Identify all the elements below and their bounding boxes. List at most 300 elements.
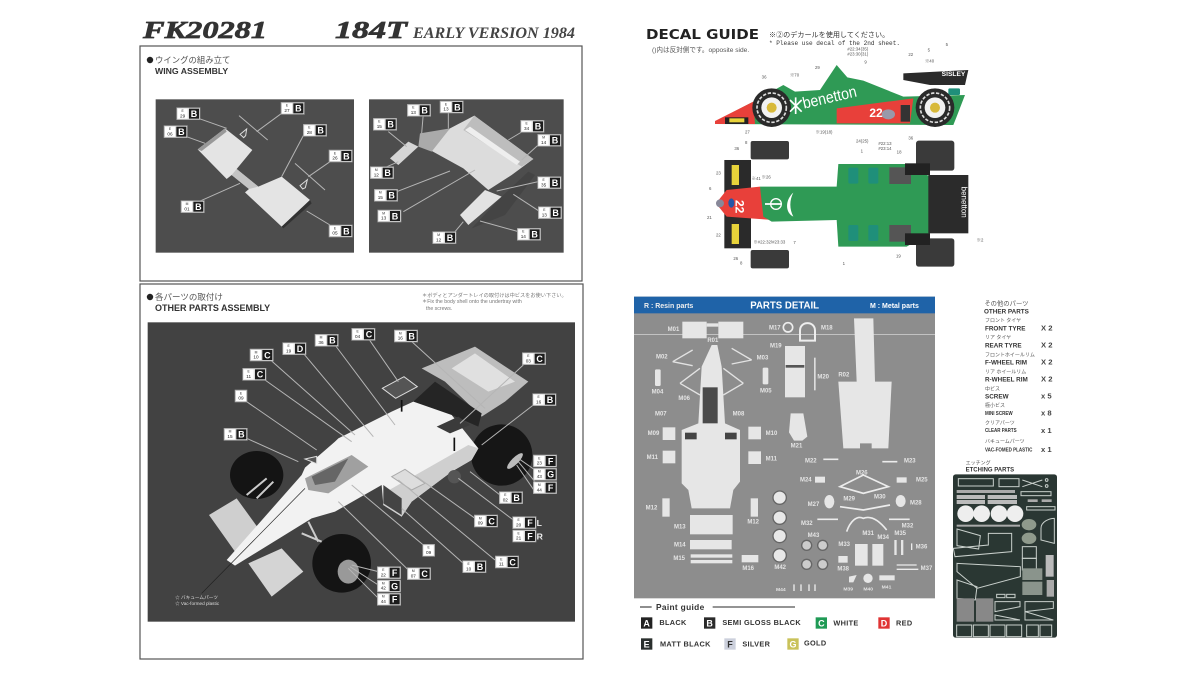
decal diagram: top view: 22 [716, 233, 721, 238]
item: f-wheel rim: X 2 [1041, 357, 1052, 366]
part labels: M15 [673, 556, 686, 562]
tag: E04 C: 04 [355, 334, 361, 339]
tag: E09: 09 [238, 396, 244, 401]
tag: E11 C: 11 [246, 374, 251, 379]
decal diagram: side view: ※19(18) [816, 129, 833, 134]
item: r-wheel rim: リア ホイールリム [985, 370, 1026, 376]
tag: M15 B: M [229, 430, 232, 434]
part labels: M05 [760, 389, 772, 395]
tag: M13 B: B [392, 211, 399, 221]
tag: E29 B: E [182, 109, 185, 113]
tag: E06 B [164, 126, 187, 138]
title: model and version [335, 18, 575, 44]
tag: E11 C lower: E [500, 557, 503, 561]
tag: E02 B [499, 492, 523, 504]
tag: M13 B: M [382, 211, 385, 215]
part labels: M44 [776, 587, 786, 593]
decal diagram: top view: benetton [960, 187, 969, 218]
item: mini screw [985, 402, 1052, 418]
tag: M10 C: C [264, 350, 271, 360]
swatch G gold [787, 638, 827, 650]
wheels M42 and M43 [773, 491, 828, 569]
tag: M10 C [250, 349, 273, 361]
swatch E matt black [641, 638, 711, 650]
swatch D red: RED [896, 618, 912, 627]
tag: E35 B: 35 [541, 182, 547, 187]
tag: E29 B: 29 [180, 113, 186, 118]
tag: E23 F: F [548, 456, 554, 466]
title: product code: FK20281 [142, 18, 267, 44]
tag: E02 B: E [504, 493, 507, 497]
tag: E06 B: E [169, 127, 172, 131]
item: r-wheel rim [985, 370, 1052, 384]
tag: E27 B: 27 [284, 108, 290, 113]
tag: M12 B [370, 167, 394, 179]
part labels: M21 [791, 443, 803, 449]
part labels: M08 [733, 411, 745, 417]
tag: E10 B: 10 [466, 566, 472, 571]
tag: E21 F R: 21 [516, 536, 522, 541]
tag: M16 B [394, 330, 418, 342]
tag: E13 B: E [412, 106, 415, 110]
tag: E06 B: 06 [167, 131, 173, 136]
tag: M07 C [407, 568, 431, 580]
part labels: M12 [646, 505, 658, 511]
decal diagram: side view: ※70 [790, 73, 800, 78]
decal diagram: side view: 36 [908, 135, 914, 140]
note: vac-formed plastic [175, 594, 220, 607]
part labels: R02 [838, 373, 850, 379]
part labels: M11 [766, 457, 778, 463]
tag: E09 [235, 390, 247, 402]
tag: M14 B: 14 [541, 140, 547, 145]
paint guide legend [640, 602, 912, 650]
swatch G gold: G [789, 639, 796, 649]
tag: E03 C: E [527, 354, 530, 358]
tag: M42 G [377, 580, 401, 592]
tag: M12 B lower: 12 [436, 237, 442, 242]
tag: M43 G: G [547, 470, 554, 480]
title: model and version: 184T [335, 18, 409, 44]
decal diagram: top view: 19 [896, 253, 901, 258]
tag: M42 G: G [391, 581, 398, 591]
title: model and version: EARLY VERSION 1984 [412, 25, 575, 42]
tag: M12 B lower: M [437, 233, 440, 237]
tag: M15 B: B [238, 430, 245, 440]
heading: decal guide: DECAL GUIDE [646, 28, 759, 43]
part labels: M32 [801, 521, 813, 527]
tag: E14 B [517, 228, 541, 240]
tag: E04 C [352, 328, 375, 340]
part labels: M07 [655, 411, 667, 417]
tag: E05 B: E [334, 226, 337, 230]
tag: M01 B: 01 [184, 206, 190, 211]
item: vac-formed plastic [985, 439, 1052, 454]
tag: E22 F: F [392, 568, 398, 578]
part labels: M11 [647, 455, 659, 461]
tag: E14 B: 14 [521, 234, 526, 239]
decal diagram: top view: ※41 [752, 176, 761, 181]
tag: M44 F front: F [392, 595, 398, 605]
tag: E35 B: B [552, 178, 559, 188]
tag: M09 C: 09 [478, 521, 483, 526]
tag: M42 G: 42 [381, 586, 386, 591]
swatch C white: C [818, 618, 825, 628]
tag: E21 F R [513, 530, 544, 542]
tag: M44 F front: M [382, 595, 385, 599]
item: clear parts: CLEAR PARTS [985, 428, 1017, 434]
photo: front wing assembly [156, 99, 354, 253]
decal diagram: side view: 5 [946, 42, 949, 47]
car model [202, 338, 535, 598]
item: rear tyre [985, 334, 1052, 349]
tag: M12 B: M [375, 168, 378, 172]
tag: E20 F L: E [518, 518, 521, 522]
part labels: M12 [747, 519, 760, 525]
tag: E34 B: B [535, 122, 542, 132]
item: mini screw: MINI SCREW [985, 411, 1013, 417]
tag: M43 G: 43 [537, 474, 542, 479]
decal diagram: top view: 7 [793, 240, 796, 245]
decal diagram: side view [715, 42, 968, 151]
decal diagram: top view: 1 [861, 149, 864, 154]
part labels: M24 [800, 477, 812, 483]
tag: M14 B: B [552, 136, 559, 146]
decal diagram: top view: 1 [843, 261, 846, 266]
heading: wing assembly: ウイングの組み立て [155, 55, 230, 65]
part labels: M14 [674, 543, 686, 549]
part labels: M01 [668, 327, 680, 333]
tag: E13 B lower: 13 [542, 212, 547, 217]
swatch A black: BLACK [659, 618, 687, 627]
heading: decal guide: ※②のデカールを使用してください。 [769, 30, 889, 39]
part labels [646, 325, 933, 593]
swatch F silver: SILVER [742, 639, 771, 648]
tag: E19 D [283, 343, 306, 355]
panel: other parts assembly [140, 284, 583, 659]
decal diagram: side view: 22 [869, 106, 883, 120]
photo: rear wing assembly [369, 99, 564, 253]
part labels: M22 [805, 459, 817, 465]
tag: M15 B: M [379, 191, 382, 195]
tag: E03 C: 03 [526, 358, 531, 363]
decal diagram: side view: 27 [745, 129, 750, 134]
tag: M12 B: 12 [374, 172, 379, 177]
tag: M36 B: B [329, 336, 336, 346]
item: mini screw: 極小ビス [985, 402, 1005, 409]
tag: E09 lower: E [428, 546, 431, 550]
tag: M44 F front [377, 593, 401, 605]
part labels: M38 [837, 567, 850, 573]
decal diagram: top view: 8 [745, 140, 748, 145]
part labels: M09 [648, 431, 660, 437]
decal diagram: top view: 26 [733, 256, 739, 261]
tag: E23 F: E [538, 456, 541, 460]
item: r-wheel rim: X 2 [1041, 375, 1052, 384]
part labels: M29 [843, 497, 856, 503]
tag: E09 lower [423, 544, 435, 556]
tag: E15 B: B [387, 120, 394, 130]
tag: E20 F L [513, 517, 543, 529]
decal diagram: top view: ※26 [762, 174, 771, 179]
heading: decal guide [646, 28, 900, 54]
swatch C white: WHITE [833, 618, 859, 627]
tag: E02 B: 02 [503, 497, 508, 502]
decal diagram: top view [707, 140, 984, 268]
tag: E29 B [177, 108, 200, 120]
tag: E02 B: B [513, 493, 520, 503]
tag: E13 B upper: E [445, 102, 448, 106]
tag: E20 F L: F [527, 518, 533, 528]
tag: E13 B lower [538, 207, 562, 219]
item: front tyre: X 2 [1041, 324, 1052, 333]
tag: M16 B: B [408, 331, 415, 341]
tag: E16 B: E [538, 395, 541, 399]
tag: E04 C: E [357, 330, 360, 334]
other parts heading: その他のパーツ [984, 299, 1029, 308]
heading: other parts assembly: 各パーツの取付け [155, 292, 223, 302]
tag: E09 lower: 09 [426, 550, 432, 555]
tag: M12 B: B [384, 168, 391, 178]
tag: E26 B: B [343, 151, 350, 161]
tag: E34 B: E [526, 122, 529, 126]
tag: E06 B: B [178, 127, 185, 137]
decal diagram: side view: 29 [815, 65, 820, 70]
decal diagram: side view: #22:13 [878, 141, 892, 146]
tag: M15 B: B [388, 191, 395, 201]
resin body R01 and floor R02 [682, 318, 892, 508]
tag: M15 B: 15 [378, 195, 383, 200]
decal diagram: side view: SISLEY [942, 71, 966, 78]
tag: E03 C: C [536, 354, 543, 364]
part labels: M26 [856, 470, 868, 476]
tag: E10 B: E [468, 562, 471, 566]
part labels: M35 [894, 531, 907, 537]
item: vac-formed plastic: VAC-FOMED PLASTIC [985, 447, 1032, 453]
tag: M15 B: 15 [227, 434, 233, 439]
tag: M13 B: 13 [381, 216, 387, 221]
tag: E21 F R: R [537, 531, 544, 541]
tag: E26 B [329, 150, 352, 162]
decal diagram: top view: 23 [716, 170, 721, 175]
resin and metal parts [655, 322, 918, 591]
heading: decal guide: ()内は反対側です。opposite side. [652, 45, 749, 54]
rear wing model [383, 112, 540, 232]
tag: E03 C [522, 353, 546, 365]
panel: parts detail [634, 297, 935, 598]
tag: E11 C lower: C [509, 557, 516, 567]
header bar: M : Metal parts [870, 303, 919, 310]
tag: M12 B lower: B [447, 233, 454, 243]
tag: M13 B [378, 210, 401, 222]
tag: E11 C lower [495, 556, 519, 568]
tag: E27 B: B [295, 104, 302, 114]
tag: E05 B [329, 225, 352, 237]
decal diagram: side view: benetton [801, 84, 858, 113]
tag: M15 B [224, 428, 247, 440]
part labels: M36 [916, 545, 928, 551]
tag: M09 C [474, 515, 498, 527]
item: r-wheel rim: R-WHEEL RIM [985, 377, 1028, 384]
tag: E29 B: B [191, 109, 198, 119]
tag: E23 F [533, 455, 557, 467]
note: vac-formed plastic: ☆ バキュームパーツ [175, 594, 218, 601]
decal diagram: side view: 36 [762, 74, 767, 79]
item: screw [985, 386, 1052, 400]
item: screw: x 5 [1041, 391, 1052, 400]
part labels: M03 [757, 355, 769, 361]
decal diagram: top view: 21 [707, 215, 712, 220]
tag: M44 F: 44 [537, 487, 542, 492]
decal diagram: side view: #23:14 [878, 146, 892, 151]
decal diagram: side view: 22 [908, 52, 914, 57]
swatch E matt black: MATT BLACK [660, 639, 711, 648]
tag: M07 C: C [421, 569, 428, 579]
decal diagram: top view: ※2 [977, 238, 984, 243]
decal diagram: top view: 22 [732, 200, 746, 214]
tag: E23 F: 23 [537, 461, 542, 466]
tag: E13 B [407, 104, 431, 116]
tag: E28 B: 28 [307, 130, 312, 135]
tag: E15 B: 15 [377, 124, 382, 129]
part labels: M42 [774, 565, 787, 571]
tag: E10 B [463, 561, 486, 573]
heading: other parts assembly [147, 292, 270, 313]
swatch A black [641, 617, 687, 629]
front wing model [187, 113, 330, 228]
tag: E15 B [373, 118, 397, 130]
tag: E05 B: 05 [332, 231, 338, 236]
tag: M14 B: M [542, 136, 545, 140]
tag: E21 F R: E [518, 531, 521, 535]
item: screw: SCREW [985, 393, 1009, 400]
decal diagram: side view: 9 [864, 59, 867, 64]
tag: M07 C: 07 [411, 573, 416, 578]
tag: E09: E [240, 391, 243, 395]
item: front tyre: フロント タイヤ [985, 317, 1021, 324]
tag: M42 G: M [382, 581, 385, 585]
tag: M43 G: M [538, 470, 541, 474]
part labels: M37 [921, 566, 933, 572]
swatch G gold: GOLD [804, 639, 827, 648]
tag: E16 B: B [547, 395, 554, 405]
tag: M10 C: M [255, 350, 258, 354]
tag: E20 F L: L [537, 518, 543, 528]
other parts heading: OTHER PARTS [984, 309, 1029, 316]
swatch B semi gloss black: B [706, 618, 713, 628]
decal diagram: top view: ※#22:32/#23:33 [753, 239, 786, 244]
part labels: R01 [707, 338, 719, 344]
tag: E13 B upper: 13 [443, 107, 449, 112]
tag: M07 C: M [412, 569, 415, 573]
decal diagram: top view: 6 [709, 186, 712, 191]
item: rear tyre: REAR TYRE [985, 342, 1022, 349]
tag: E13 B upper: B [454, 102, 461, 112]
heading: wing assembly: WING ASSEMBLY [155, 66, 228, 76]
part labels: M31 [862, 531, 875, 537]
photo: car assembly [148, 322, 575, 622]
decal diagram: top view: 18 [897, 149, 902, 154]
part labels: M34 [877, 535, 890, 541]
part labels: M32 [902, 523, 914, 529]
heading: other parts assembly: OTHER PARTS ASSEMBLY [155, 303, 270, 313]
tag: E13 B: B [421, 106, 428, 116]
tag: M09 C: C [488, 516, 495, 526]
tag: E11 C: C [257, 370, 264, 380]
part labels: M39 [843, 587, 853, 593]
tag: M09 C: M [479, 516, 482, 520]
part labels: M17 [769, 325, 781, 331]
tag: E26 B: E [334, 151, 337, 155]
decal diagram: top view: 36 [734, 146, 740, 151]
tag: E34 B: 34 [524, 126, 530, 131]
paint guide heading: Paint guide [656, 602, 705, 612]
item: f-wheel rim: F-WHEEL RIM [985, 359, 1027, 366]
list: other parts [953, 299, 1057, 638]
part labels: M19 [770, 343, 782, 349]
part labels: M33 [838, 542, 851, 548]
part labels: M18 [821, 325, 833, 331]
decal diagram: side view: #22:34(35) [847, 47, 869, 52]
part labels: M23 [904, 459, 916, 465]
tag: E35 B: E [543, 178, 546, 182]
part labels: M30 [874, 495, 886, 501]
etching parts heading: ETCHING PARTS [966, 468, 1014, 474]
tag: M36 B: 36 [318, 340, 324, 345]
swatch C white [816, 617, 859, 629]
tag: E10 B: B [477, 562, 484, 572]
item: clear parts [985, 420, 1052, 435]
other parts heading [984, 299, 1029, 316]
tag: E20 F L: 20 [516, 522, 522, 527]
tag: E13 B: 13 [411, 110, 416, 115]
tag: E22 F: E [382, 568, 385, 572]
tag: E28 B: E [308, 126, 311, 130]
tag: M44 F: F [548, 483, 554, 493]
item: front tyre: FRONT TYRE [985, 325, 1025, 332]
tag: M12 B lower [433, 232, 456, 244]
item: rear tyre: リア タイヤ [985, 334, 1011, 341]
item: f-wheel rim [985, 352, 1052, 366]
tag: M15 B [374, 189, 398, 201]
tag: M44 F front: 44 [381, 599, 386, 604]
panel: wing assembly [140, 46, 582, 281]
note: vac-formed plastic: ☆ Vac-formed plastic [175, 600, 220, 607]
part labels: M04 [652, 389, 664, 395]
decal diagram: side view: ※40 [925, 59, 935, 64]
tag: E26 B: 26 [332, 156, 338, 161]
item: clear parts: クリアパーツ [985, 420, 1015, 426]
etching parts heading [966, 459, 1014, 474]
etching parts heading: エッチング [966, 459, 991, 466]
item: vac-formed plastic: バキュームパーツ [985, 439, 1025, 445]
tag: E34 B [521, 120, 544, 132]
item: screw: 中ビス [985, 386, 1000, 393]
header bar [634, 297, 935, 313]
part labels: M13 [674, 524, 686, 530]
part labels: M40 [863, 587, 873, 593]
part labels: M06 [678, 396, 691, 402]
item: clear parts: x 1 [1041, 426, 1052, 435]
decal diagram: side view: #23:30(31) [847, 51, 869, 56]
tag: E13 B upper [440, 101, 463, 113]
tag: M14 B [538, 134, 561, 146]
tag: E19 D: E [288, 344, 291, 348]
item: front tyre [985, 317, 1052, 333]
tag: E22 F [377, 567, 401, 579]
tag: E21 F R: F [527, 531, 533, 541]
swatch E matt black: E [644, 639, 650, 649]
